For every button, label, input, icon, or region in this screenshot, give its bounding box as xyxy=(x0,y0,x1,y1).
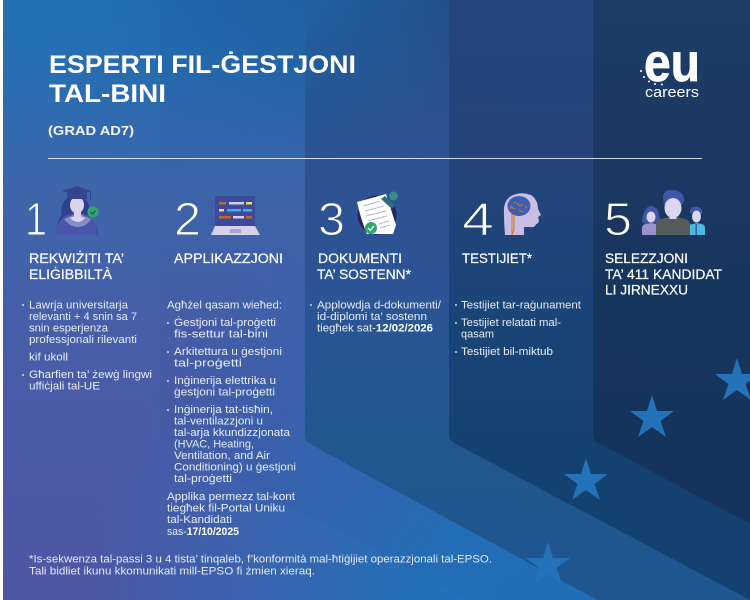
specialisms list: Inġinerija elettrika u xyxy=(174,375,276,387)
tests list xyxy=(455,300,581,358)
requirements list xyxy=(22,300,152,392)
heading: TA’ 411 KANDIDAT xyxy=(605,267,722,282)
specialisms list: Ventilation, and Air xyxy=(174,450,271,462)
documents list: id-diplomi ta’ sostenn xyxy=(317,311,427,323)
requirements list: professjonali rilevanti xyxy=(29,334,137,346)
specialisms list: Agħżel qasam wieħed: xyxy=(167,300,282,312)
requirements list: snin esperjenza xyxy=(29,322,108,334)
heading xyxy=(605,251,722,298)
panel: step 2 application xyxy=(167,193,296,538)
tests list: qasam xyxy=(461,328,494,340)
requirements list: Għarfien ta’ żewġ lingwi xyxy=(29,369,152,381)
logo: EU careers: eu xyxy=(644,33,700,93)
specialisms list: Arkitettura u ġestjoni xyxy=(174,346,282,358)
icon: group of people xyxy=(642,190,705,235)
panel: step 4 column xyxy=(449,0,750,600)
application deadline: tal-Kandidati xyxy=(167,514,232,526)
requirements list: relevanti + 4 snin sa 7 xyxy=(29,311,137,323)
requirements list: uffiċjali tal-UE xyxy=(29,380,100,392)
subtitle: grade: (GRAD AD7) xyxy=(48,123,134,138)
tests list: Testijiet bil-miktub xyxy=(461,346,553,358)
panel: step 1 eligibility xyxy=(22,186,152,392)
heading: ELIĠIBBILTÀ xyxy=(29,267,112,282)
panel: step 5 column xyxy=(593,0,750,524)
specialisms list: Inġinerija tat-tisħin, xyxy=(174,404,273,416)
footnote: Tali bidliet ikunu kkomunikati mill-EPSO fi żmien xieraq. xyxy=(29,566,315,578)
heading: TESTIJIET* xyxy=(462,251,532,266)
footnote xyxy=(29,554,492,578)
specialisms list: Ġestjoni tal-proġetti xyxy=(174,316,276,329)
specialisms list: tal-proġetti xyxy=(174,358,242,370)
specialisms list: (HVAC, Heating, xyxy=(174,438,254,450)
specialisms list: ġestjoni tal-proġetti xyxy=(174,386,275,398)
panel: step 5 selection xyxy=(604,190,722,298)
icon: head with brain xyxy=(504,193,541,235)
heading: DOKUMENTI xyxy=(318,251,402,266)
application deadline: Applika permezz tal-kont xyxy=(167,491,295,503)
icon: document and stamp xyxy=(357,192,398,234)
requirements list: Lawrja universitarja xyxy=(29,300,128,312)
logo: EU careers: careers xyxy=(645,84,699,101)
decorative EU stars xyxy=(526,358,750,584)
number 4: 4 xyxy=(462,193,494,245)
documents list xyxy=(310,300,441,334)
icon: graduate xyxy=(56,186,99,235)
heading: TA’ SOSTENN* xyxy=(317,267,411,282)
number 5: 5 xyxy=(604,193,632,245)
panel: step 3 documents xyxy=(310,192,441,334)
title xyxy=(49,50,356,108)
heading: SELEZZJONI xyxy=(605,251,688,266)
heading: LI JIRNEXXU xyxy=(605,282,688,298)
number 3: 3 xyxy=(318,193,345,245)
heading xyxy=(317,251,411,282)
specialisms list xyxy=(167,300,296,485)
specialisms list: tal-arja kkundizzjonata xyxy=(174,427,290,439)
number 1: 1 xyxy=(25,193,47,245)
icon: laptop xyxy=(211,196,260,235)
title: TAL-BINI xyxy=(49,80,166,108)
requirements list: kif ukoll xyxy=(29,352,68,364)
panel: step 3 column xyxy=(305,0,750,600)
heading xyxy=(29,251,124,282)
specialisms list: Conditioning) u ġestjoni xyxy=(174,462,296,474)
documents list: tiegħek sat- 12/02/2026 xyxy=(317,322,433,334)
specialisms list: tal-proġetti xyxy=(174,473,232,485)
documents list: Applowdja d-dokumenti/ xyxy=(317,300,441,312)
number 2: 2 xyxy=(174,193,201,245)
specialisms list: fis-settur tal-bini xyxy=(174,328,268,340)
tests list: Testijiet relatati mal- xyxy=(461,317,561,329)
panel: step 4 tests xyxy=(455,193,581,358)
heading: REKWIŻITI TA’ xyxy=(29,251,124,266)
application deadline: tiegħek fil-Portal Uniku xyxy=(167,502,285,514)
application deadline xyxy=(167,491,295,538)
specialisms list: tal-ventilazzjoni u xyxy=(174,416,263,428)
heading: APPLIKAZZJONI xyxy=(174,251,283,266)
footnote: *Is-sekwenza tal-passi 3 u 4 tista’ tinqaleb, f’konformità mal-ħtiġijiet operazzjonali tal-EPSO. xyxy=(29,554,492,566)
application deadline: sas-17/10/2025 xyxy=(167,526,239,538)
tests list: Testijiet tar-raġunament xyxy=(461,300,581,312)
panel: step 2 column xyxy=(160,0,750,600)
title: ESPERTI FIL-ĠESTJONI xyxy=(49,50,356,79)
